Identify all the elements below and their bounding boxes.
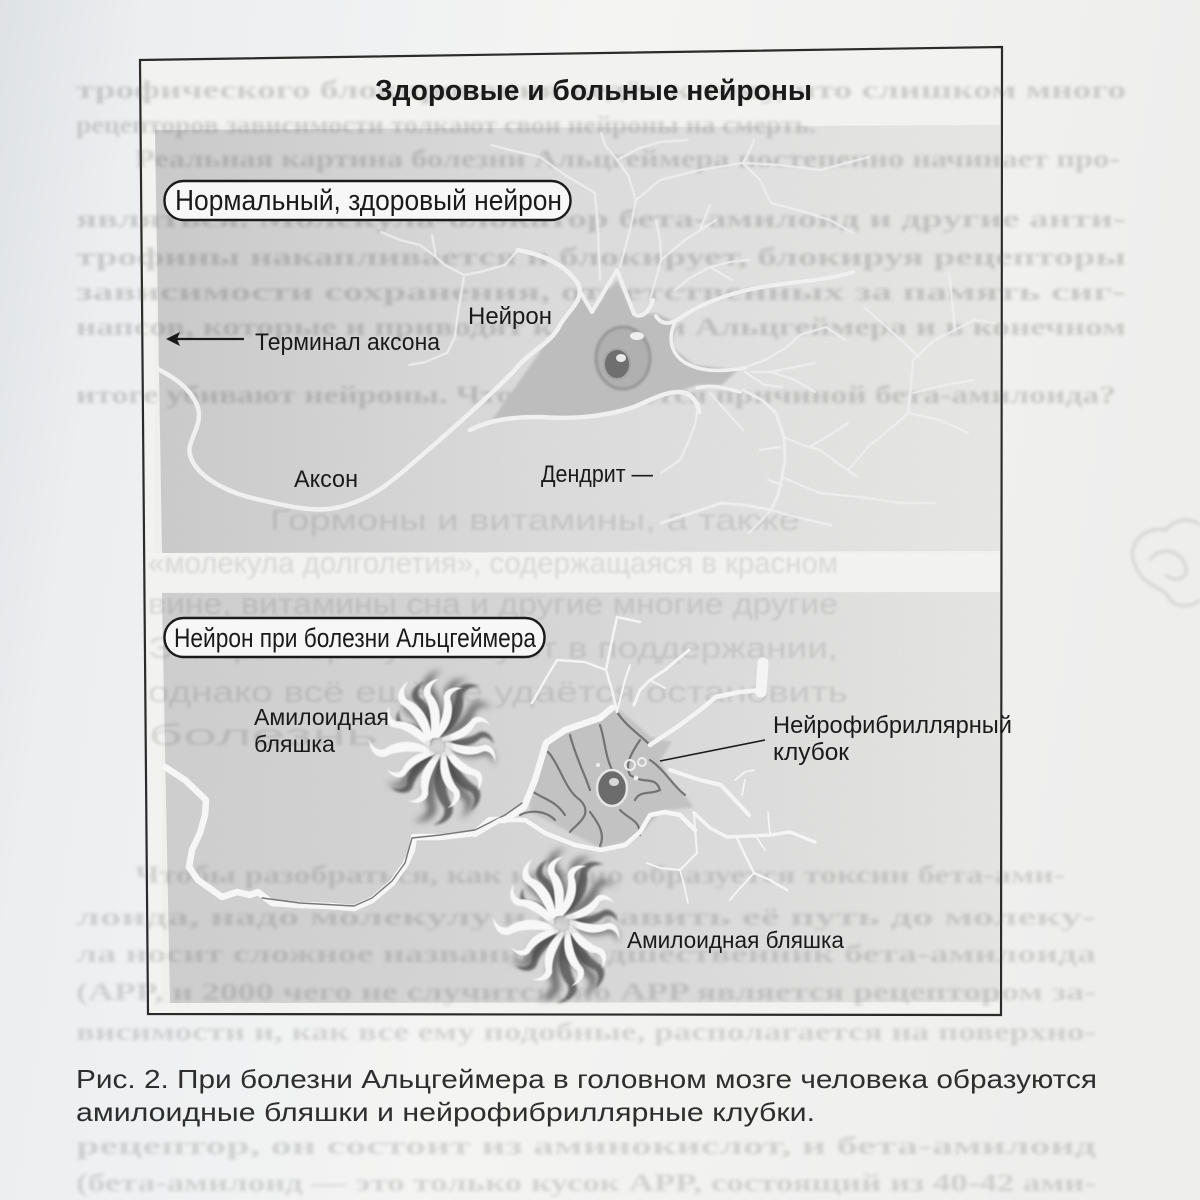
show-through text from the next page, upper block (76, 77, 1126, 409)
show-through text from the next page, upper block: итоге убивают нейроны. Что же является причиной бета-амилоида? (76, 382, 1116, 409)
illustration: Alzheimer neuron (165, 617, 815, 908)
show-through text from the next page, lower block (76, 862, 1097, 1197)
show-through text from the next page, lower block: (бета-амилоид — это только кусок APP, состоящий из 40-42 ами- (76, 1170, 1096, 1197)
caption: амилоидные бляшки и нейрофибриллярные клубки. (76, 1097, 815, 1127)
show-through text from the next page, upper block: напсов, которые и приводят к болезни Альцгеймера и в конечном (76, 314, 1126, 341)
show-through text from the next page, middle block: вине, витамины сна и другие многие другие (148, 588, 838, 621)
caption: Рис. 2. При болезни Альцгеймера в головном мозге человека образуются (76, 1064, 1097, 1094)
panel: healthy neuron background (155, 125, 1000, 553)
show-through text from the next page, lower block: рецептор, он состоит из аминокислот, и бета-амилоид (76, 1133, 1097, 1160)
label: dendrite: Дендрит — (541, 461, 653, 488)
neuron body (490, 280, 738, 423)
tangles (520, 712, 685, 846)
icon: amyloid plaque lower (493, 848, 620, 1003)
arrow: axon terminal direction (166, 332, 244, 346)
icon: amyloid plaque upper (369, 670, 496, 825)
label: neurofibrillary tangle: Нейрофибриллярный (773, 712, 1012, 739)
fine dendrites (381, 133, 995, 533)
lower soma edge (470, 392, 699, 430)
label: healthy neuron pill: Нормальный, здоровый нейрон (175, 185, 562, 217)
illustration: healthy neuron (156, 133, 995, 533)
label: Alzheimer neuron pill (164, 618, 544, 657)
nucleus (596, 327, 650, 389)
show-through ornament on the right margin (1132, 520, 1200, 606)
label: amyloid plaque upper: бляшка (254, 731, 335, 757)
label: neurofibrillary tangle: клубок (773, 739, 850, 766)
label: neuron: Нейрон (468, 303, 552, 330)
axon (156, 250, 580, 509)
show-through text from the next page, upper block: трофического блокирования ведёт к тому, что слишком много (76, 77, 1126, 104)
show-through text from the next page, upper block: зависимости сохранения, ответственных за память сиг- (76, 279, 1126, 306)
diseased neuron body (530, 708, 694, 848)
title: Здоровые и больные нейроны (375, 75, 812, 107)
label: axon: Аксон (294, 466, 358, 493)
nucleus (596, 758, 646, 806)
show-through text from the next page, middle block: болезнь (148, 719, 378, 752)
dendrites (532, 617, 815, 903)
show-through text from the next page, middle block: Гормоны и витамины, а также (270, 504, 800, 537)
show-through text from the next page, lower block: висимости и, как все ему подобные, располагается на поверхно- (76, 1019, 1096, 1046)
show-through text from the next page, middle block (148, 504, 848, 752)
panel: white figure frame (140, 47, 1002, 1015)
show-through text from the next page, upper block: рецепторов зависимости толкают свои нейроны на смерть. (76, 112, 816, 139)
show-through text from the next page, lower block: ла носит сложное название предшественник бета-амилоида (76, 941, 1097, 968)
show-through text from the next page, lower block: Чтобы разобраться, как именно образуется токсин бета-ами- (135, 862, 1065, 889)
label: Alzheimer neuron pill: Нейрон при болезни Альцгеймера (174, 623, 537, 653)
show-through text from the next page, middle block: Эти факторы участвуют в поддержании, (148, 632, 838, 665)
show-through text from the next page, lower block: лоида, надо молекулу и составить её путь до молеку- (76, 904, 1096, 931)
show-through text from the next page, upper block: Реальная картина болезни Альцгеймера постепенно начинает про- (135, 146, 1120, 173)
axon (165, 708, 695, 908)
label: amyloid plaque upper: Амилоидная (254, 704, 389, 730)
show-through text from the next page, middle block: «молекула долголетия», содержащаяся в красном (148, 547, 838, 580)
show-through text from the next page, lower block: (APP, и 2000 чего не случится, но APP является рецептором за- (76, 979, 1096, 1006)
show-through text from the next page, upper block: являться. Молекула-блокатор бета-амилоид и другие анти- (76, 206, 1126, 233)
show-through text from the next page, middle block: однако всё ещё не удаётся остановить (148, 676, 848, 709)
label: amyloid plaque lower: Амилоидная бляшка (627, 927, 844, 953)
leader line: neurofibrillary tangle (660, 740, 765, 761)
panel: Alzheimer neuron background (162, 592, 1000, 1003)
thick dendrites (581, 270, 853, 323)
label: axon terminal: Терминал аксона (255, 329, 441, 356)
show-through text from the next page, upper block: трофины накапливается и блокирует, блокируя рецепторы (76, 244, 1126, 271)
